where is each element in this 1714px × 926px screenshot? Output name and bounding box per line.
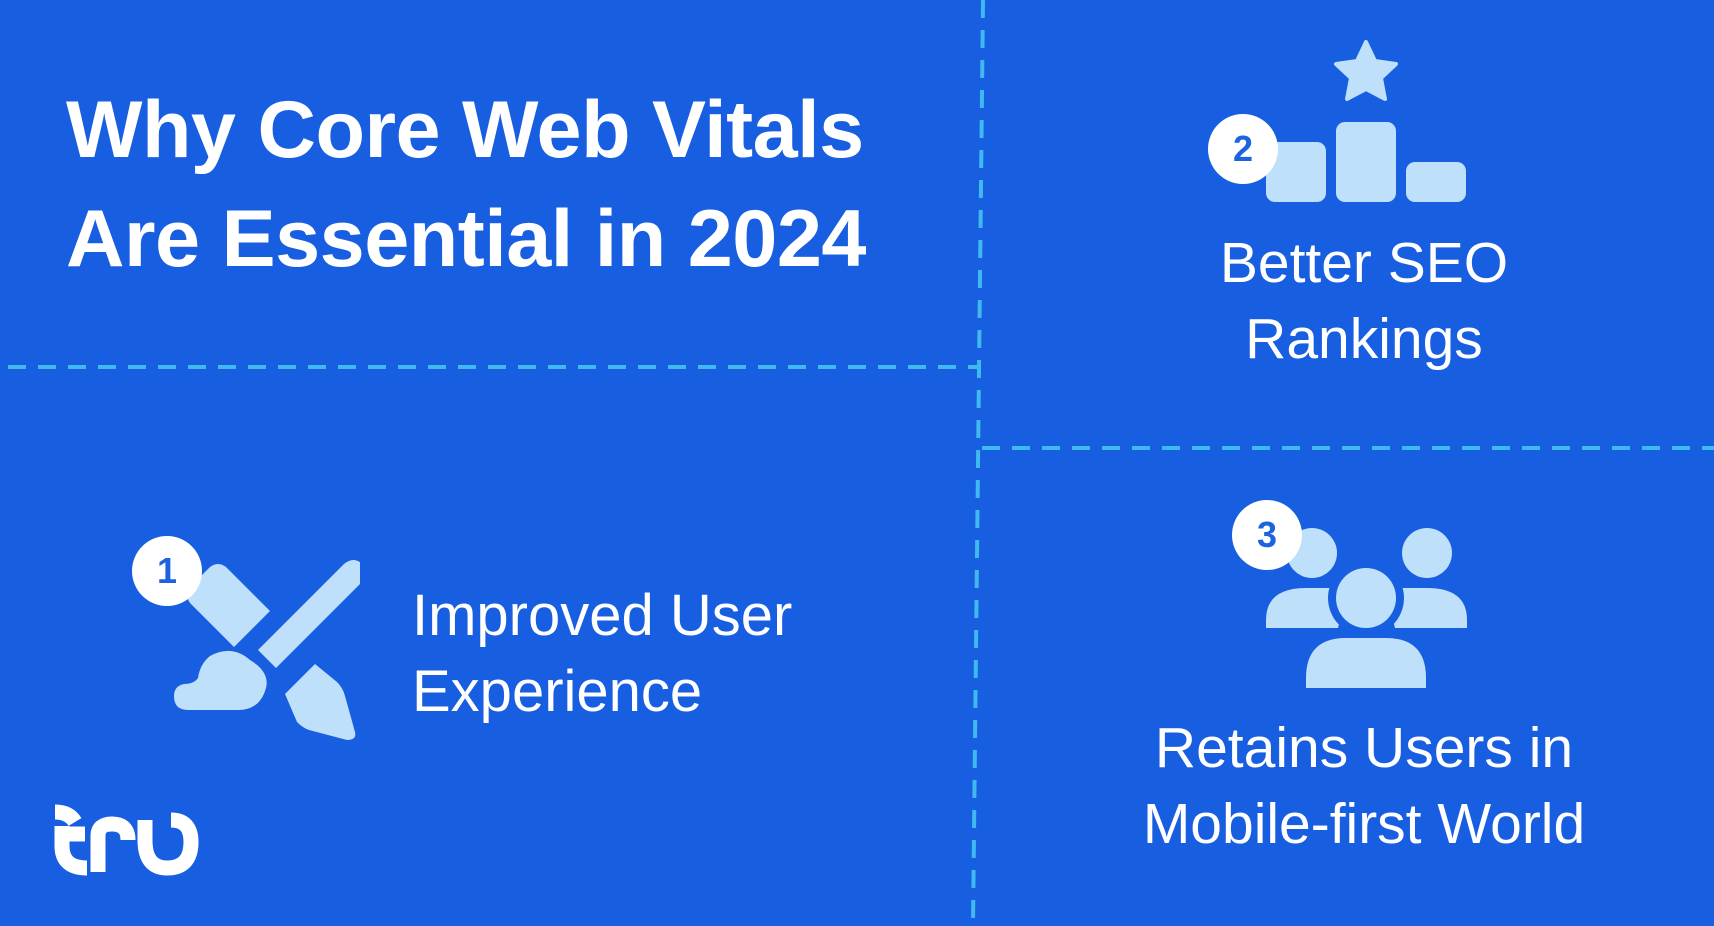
text: better SEO	[1220, 231, 1508, 371]
badge 3: 3	[1257, 514, 1277, 555]
text: improved UX: Improved User	[412, 583, 792, 648]
badge 2	[1208, 114, 1278, 184]
text: retains users: Retains Users in	[1155, 716, 1573, 780]
badge 1: 1	[157, 550, 177, 591]
text: retains users	[1143, 716, 1585, 856]
title: Are Essential in 2024	[66, 194, 866, 284]
icon: podium with star	[1266, 40, 1466, 202]
text: improved UX: Experience	[412, 659, 702, 724]
icon: brush and pen	[174, 560, 360, 740]
badge 2: 2	[1233, 128, 1253, 169]
badge 3	[1232, 500, 1302, 570]
logo	[54, 804, 198, 876]
icon: users	[1266, 528, 1467, 688]
title	[66, 85, 866, 284]
text: better SEO: Rankings	[1245, 307, 1483, 371]
badge 1	[132, 536, 202, 606]
text: improved UX	[412, 583, 792, 724]
title: Why Core Web Vitals	[66, 85, 864, 175]
text: better SEO: Better SEO	[1220, 231, 1508, 295]
text: retains users: Mobile-first World	[1143, 792, 1585, 856]
